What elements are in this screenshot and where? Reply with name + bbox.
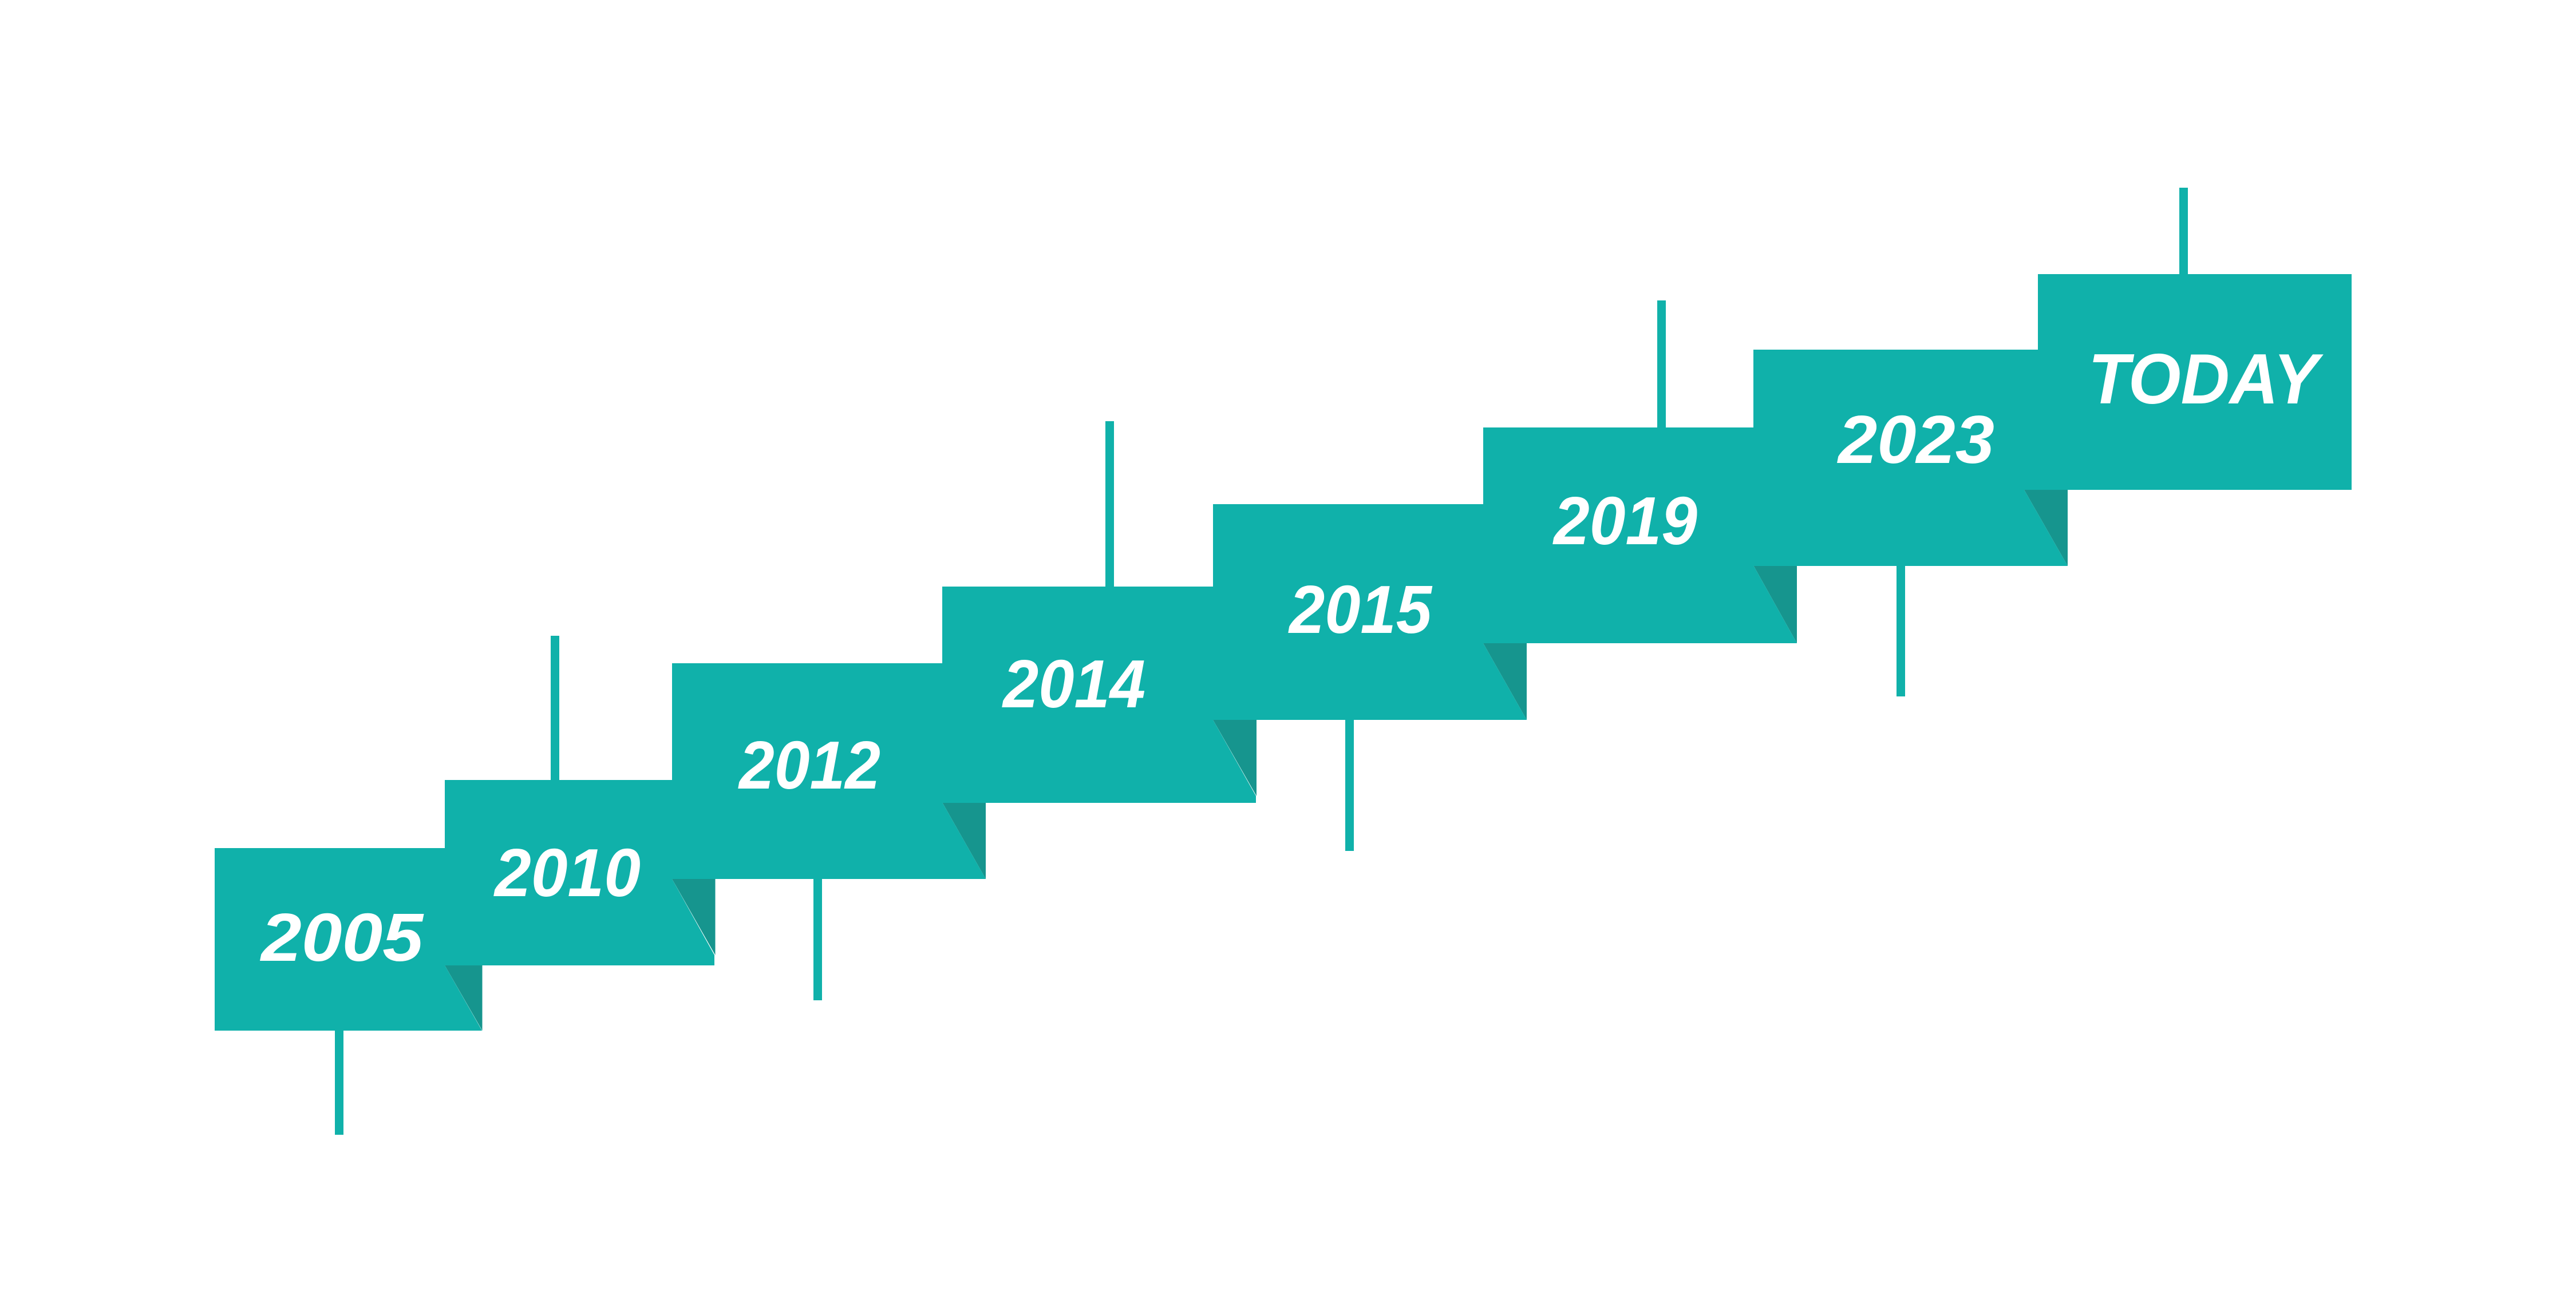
ribbon fold: 2015 <box>1483 643 1527 720</box>
ribbon fold: 2023 <box>2024 490 2068 566</box>
ribbon: 2010 <box>445 780 714 965</box>
ribbon: 2023 <box>1753 350 2068 566</box>
ribbon: 2019 <box>1483 427 1797 643</box>
ribbon fold: 2014 <box>1213 720 1257 796</box>
stem: 2019 <box>1657 300 1666 433</box>
ribbon fold: 2019 <box>1753 565 1797 643</box>
year: 2019: 2019 <box>1552 483 1697 559</box>
year: 2015: 2015 <box>1288 572 1433 648</box>
step: 2015 <box>1213 504 1527 851</box>
stem: 2014 <box>1105 421 1114 593</box>
step: 2005 <box>215 848 482 1135</box>
ribbon: today <box>2038 274 2352 490</box>
step: 2019 <box>1483 300 1797 643</box>
step: today <box>2038 188 2352 490</box>
ribbon fold: 2005 <box>445 965 482 1031</box>
ribbon: 2015 <box>1213 504 1527 720</box>
stem: today <box>2179 188 2188 279</box>
step: 2023 <box>1753 350 2068 696</box>
ribbon fold: 2012 <box>942 802 986 879</box>
ribbon: 2005 <box>215 848 482 1031</box>
stem: 2023 <box>1897 561 1905 696</box>
year: 2010: 2010 <box>493 835 641 911</box>
year: 2005: 2005 <box>260 900 424 976</box>
year: 2014: 2014 <box>1002 646 1145 722</box>
ribbon: 2014 <box>942 587 1256 803</box>
stem: 2010 <box>551 636 559 786</box>
stem: 2015 <box>1345 715 1354 851</box>
stem: 2012 <box>813 873 822 1000</box>
year: 2023: 2023 <box>1837 402 1994 478</box>
step: 2014 <box>942 421 1257 803</box>
year: 2012: 2012 <box>738 727 880 803</box>
stem: 2005 <box>335 1024 343 1135</box>
step: 2012 <box>672 663 986 1000</box>
label: today: TODAY <box>2088 340 2324 419</box>
ribbon: 2012 <box>672 663 986 879</box>
step: 2010 <box>445 636 716 965</box>
ribbon fold: 2010 <box>672 879 716 955</box>
